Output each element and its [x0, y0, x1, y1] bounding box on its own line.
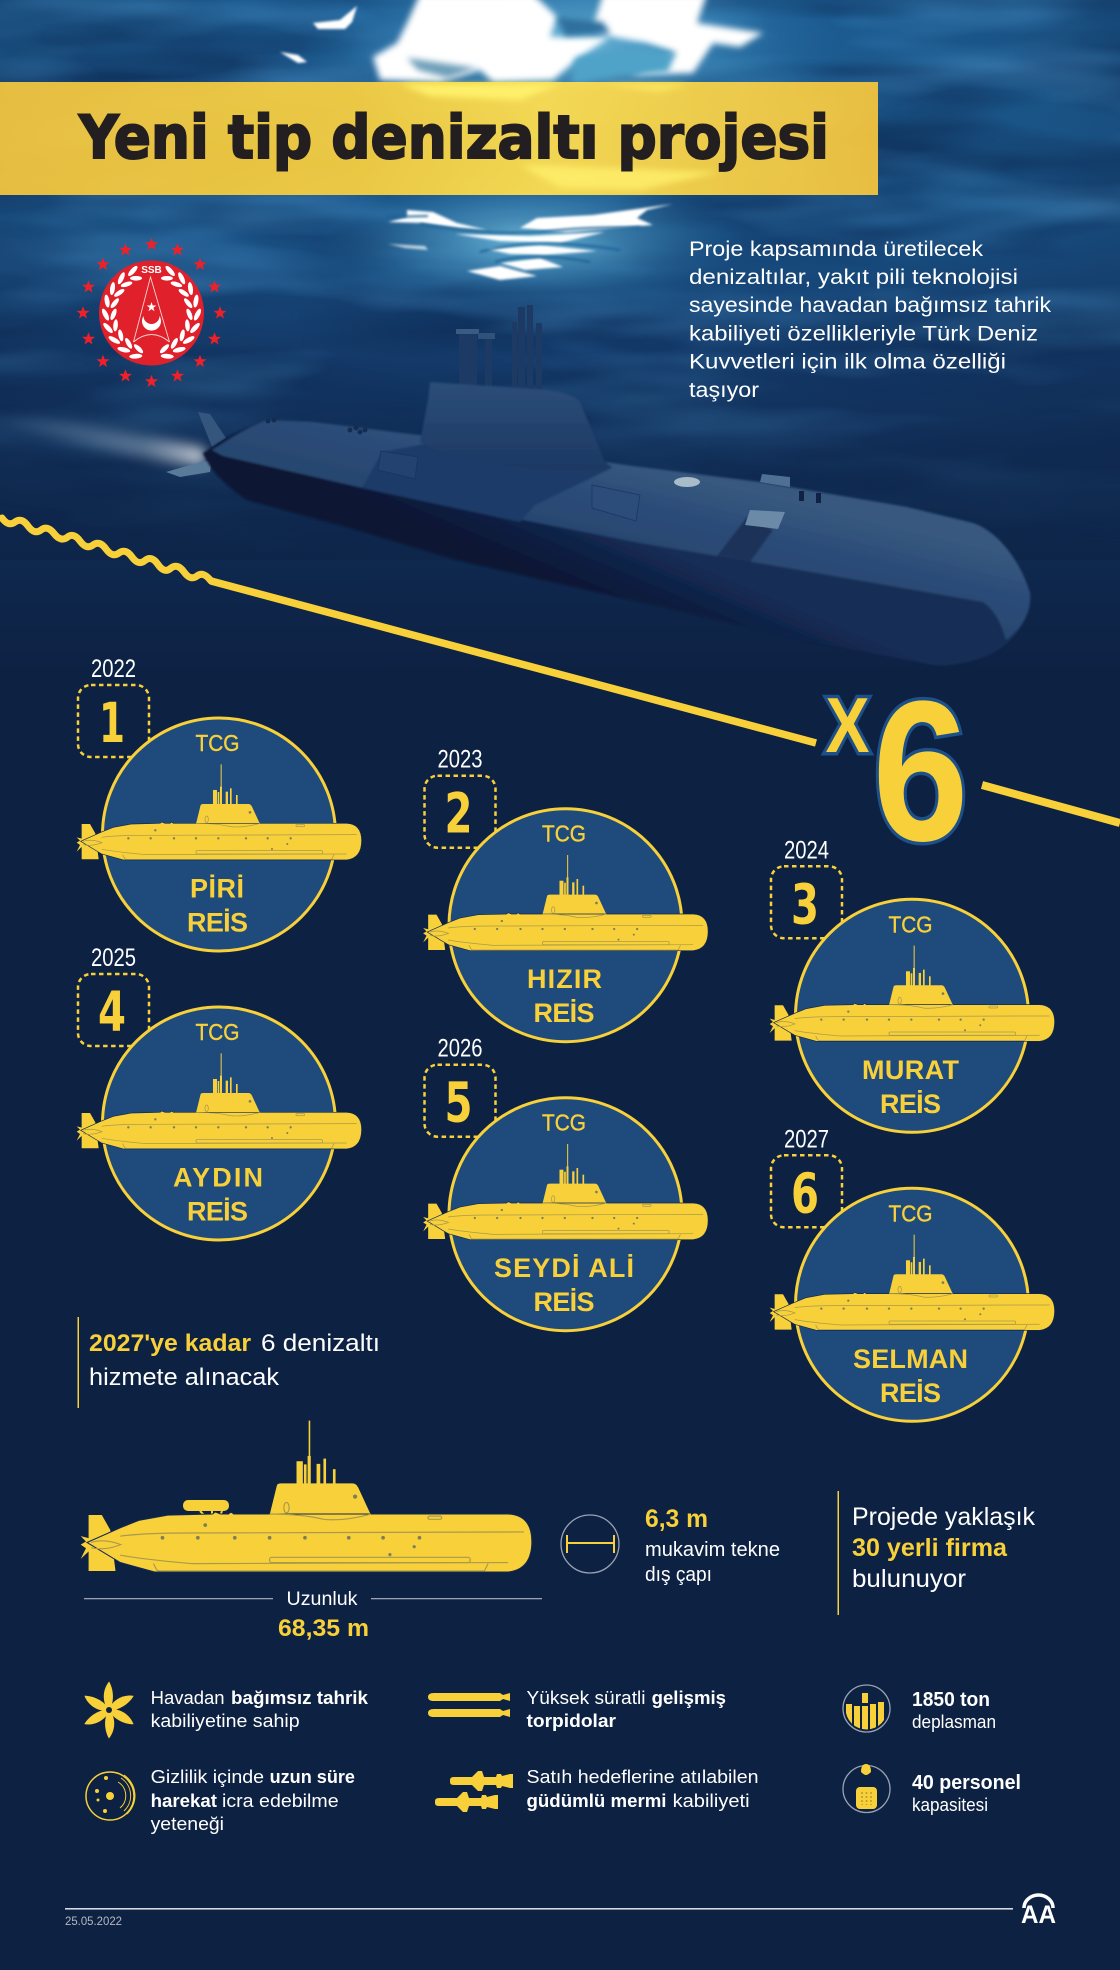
feature: air independent propulsion: bağımsız tahrik — [231, 1687, 369, 1708]
number badge — [78, 974, 149, 1046]
name — [527, 964, 602, 1028]
hull lower body — [203, 420, 1030, 665]
disc — [796, 899, 1028, 1132]
feature: long stealth missions: icra edebilme — [222, 1790, 339, 1811]
name — [173, 1162, 263, 1226]
name: SEYDİ ALİ — [494, 1253, 634, 1283]
feature: displacement: 1850 ton — [912, 1689, 990, 1711]
card 3: Murat Reis — [770, 836, 1055, 1132]
year: 2023 — [438, 746, 482, 774]
name: SELMAN — [853, 1344, 968, 1374]
card 1: Piri Reis — [77, 655, 362, 951]
feature: torpedoes: Yüksek süratli — [526, 1687, 646, 1708]
submarine silhouette — [770, 946, 1055, 1041]
number badge — [424, 1065, 496, 1137]
length measure: 68,35 m — [278, 1615, 369, 1642]
icon: guided missiles — [435, 1771, 513, 1812]
rudder fins — [198, 412, 226, 447]
number badge — [771, 1155, 842, 1227]
name — [494, 1253, 634, 1317]
feature: guided missiles: kabiliyeti — [673, 1790, 750, 1811]
SSB label: SSB — [141, 265, 162, 276]
feature: long stealth missions — [151, 1766, 355, 1834]
year: 2022 — [91, 655, 136, 683]
name: AYDIN — [173, 1162, 263, 1192]
length measure — [84, 1589, 542, 1642]
yellow timeline wave and line — [2, 518, 1120, 823]
feature: long stealth missions: Gizlilik içinde — [151, 1766, 264, 1787]
sail shadow on hull — [362, 443, 612, 522]
big multiplier x6: X — [826, 681, 870, 769]
feature: crew: 40 personel — [912, 1772, 1021, 1794]
card 5: Seydi Ali Reis: 5 — [444, 1071, 472, 1135]
local firms note — [838, 1491, 1035, 1615]
disc — [796, 1188, 1028, 1421]
feature: displacement — [912, 1689, 996, 1732]
card 1: Piri Reis: 1 — [99, 691, 125, 755]
big multiplier x6: 6 — [872, 660, 968, 883]
local firms note: bulunuyor — [852, 1565, 966, 1593]
intro text block: denizaltılar, yakıt pili teknolojisi — [689, 265, 1018, 289]
hull upper deck — [212, 420, 1030, 640]
feature: air independent propulsion — [151, 1687, 369, 1731]
card 6: Selman Reis — [770, 1125, 1055, 1421]
feature: displacement: deplasman — [912, 1711, 996, 1732]
feature: air independent propulsion: Havadan — [151, 1687, 225, 1708]
feature: guided missiles: güdümlü mermi — [526, 1790, 666, 1811]
TCG: TCG — [542, 1110, 586, 1136]
feature: guided missiles: Satıh hedeflerine atılabilen — [526, 1766, 758, 1787]
name — [853, 1344, 968, 1408]
length measure: Uzunluk — [286, 1589, 358, 1610]
card 4: Aydın Reis: 4 — [98, 980, 126, 1044]
name: REİS — [534, 998, 594, 1028]
lower glow — [315, 168, 745, 312]
name: PİRİ — [190, 874, 244, 904]
card 3: Murat Reis: 3 — [791, 872, 819, 936]
propeller wake — [0, 414, 205, 466]
submarine silhouette — [770, 1235, 1055, 1330]
triangle, crescent, star — [134, 277, 170, 342]
card 6: Selman Reis: 6 — [791, 1161, 819, 1225]
hull body — [203, 382, 1030, 665]
feature: guided missiles — [526, 1766, 758, 1811]
icon: hull diameter — [561, 1515, 619, 1573]
card 2: Hızır Reis — [423, 746, 708, 1042]
icon: SSB emblem — [76, 238, 226, 387]
hull diameter text: 6,3 m — [645, 1505, 708, 1533]
submarine silhouette — [77, 764, 362, 860]
feature: torpedoes: gelişmiş — [652, 1687, 726, 1708]
name: REİS — [534, 1287, 594, 1317]
icon: crew — [843, 1764, 890, 1812]
name: REİS — [880, 1378, 941, 1408]
feature: torpedoes — [526, 1687, 726, 1731]
intro text block: taşıyor — [689, 378, 759, 402]
number badge — [424, 776, 496, 848]
surface highlights — [373, 0, 763, 82]
name: MURAT — [862, 1055, 960, 1085]
icon: displacement — [843, 1685, 890, 1736]
feature: crew: kapasitesi — [912, 1794, 988, 1815]
feature: long stealth missions: yeteneği — [151, 1813, 224, 1834]
number badge — [771, 866, 842, 938]
name — [187, 874, 248, 938]
card 4: Aydın Reis — [77, 944, 362, 1240]
feature: torpedoes: torpidolar — [526, 1710, 616, 1731]
star ring — [76, 238, 226, 387]
feature: air independent propulsion: kabiliyetine sahip — [151, 1710, 300, 1731]
conning tower — [420, 382, 613, 471]
submarine silhouette — [423, 1144, 708, 1240]
TCG: TCG — [196, 730, 240, 756]
lower highlights — [388, 204, 673, 280]
shadow band — [717, 517, 773, 562]
submarine photo — [0, 305, 1030, 665]
hull diameter text: mukavim tekne — [645, 1539, 780, 1561]
name: REİS — [880, 1089, 941, 1119]
delivery note: 2027'ye kadar — [89, 1330, 251, 1357]
feature: long stealth missions: uzun süre — [270, 1766, 355, 1787]
name: REİS — [187, 908, 248, 938]
intro text block: kabiliyeti özellikleriyle Türk Deniz — [689, 322, 1038, 346]
large submarine profile — [81, 1421, 532, 1572]
ocean surface backdrop — [0, 0, 1120, 598]
TCG: TCG — [542, 821, 586, 847]
icon: torpedoes — [428, 1693, 510, 1717]
card 5: Seydi Ali Reis — [423, 1035, 708, 1331]
icon: propeller — [82, 1681, 136, 1739]
red disc — [99, 260, 204, 366]
delivery note: hizmete alınacak — [89, 1364, 280, 1391]
hull diameter text — [645, 1505, 780, 1586]
intro text block: Proje kapsamında üretilecek — [689, 237, 983, 261]
title: Yeni tip denizaltı projesi — [78, 103, 829, 173]
date: 25.05.2022 — [65, 1916, 122, 1928]
TCG: TCG — [888, 1200, 932, 1226]
delivery note: 6 denizaltı — [261, 1330, 380, 1357]
title banner — [0, 82, 878, 195]
TCG: TCG — [888, 911, 932, 937]
name: REİS — [187, 1196, 248, 1226]
disc — [449, 1098, 682, 1331]
disc — [102, 1007, 336, 1240]
name — [862, 1055, 960, 1119]
submarine silhouette — [77, 1053, 362, 1149]
masts — [456, 305, 542, 390]
year: 2024 — [784, 836, 829, 864]
intro text block — [689, 237, 1051, 402]
year: 2026 — [438, 1035, 482, 1063]
footer rule — [65, 1908, 1013, 1910]
big multiplier x6 — [826, 660, 968, 883]
feature: crew — [912, 1772, 1021, 1815]
icon: stealth radar — [86, 1772, 135, 1820]
glow at surface — [300, 0, 840, 145]
disc — [449, 809, 682, 1042]
icon: AA logo: AA — [1021, 1901, 1056, 1929]
feature: long stealth missions: harekat — [151, 1790, 217, 1811]
submarine silhouette — [423, 855, 708, 951]
disc — [102, 718, 336, 951]
card 2: Hızır Reis: 2 — [444, 782, 472, 846]
TCG: TCG — [196, 1019, 240, 1045]
deck fittings — [674, 477, 700, 487]
year: 2025 — [91, 944, 136, 972]
local firms note: 30 yerli firma — [852, 1534, 1008, 1562]
year: 2027 — [784, 1125, 829, 1153]
name: HIZIR — [527, 964, 602, 994]
local firms note: Projede yaklaşık — [852, 1503, 1035, 1531]
delivery note — [78, 1317, 380, 1408]
intro text block: Kuvvetleri için ilk olma özelliği — [689, 350, 1006, 374]
number badge — [78, 685, 149, 757]
laurel — [100, 264, 147, 363]
hull diameter text: dış çapı — [645, 1564, 712, 1586]
intro text block: sayesinde havadan bağımsız tahrik — [689, 293, 1051, 317]
